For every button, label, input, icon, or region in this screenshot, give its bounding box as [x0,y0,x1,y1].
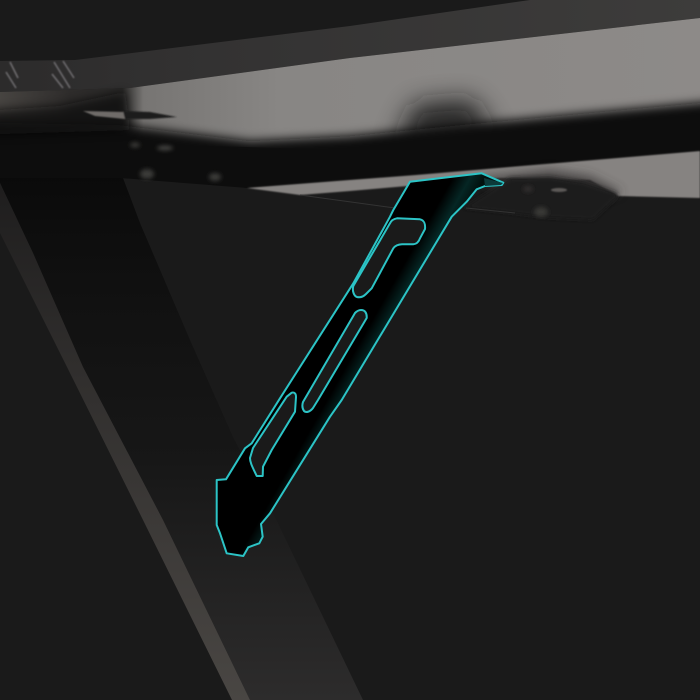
lower lit strip [247,151,700,198]
leg lit edge [0,183,250,700]
desk underside lit panel [0,18,700,150]
bracket tip [484,178,503,186]
left joint shadow [0,92,130,135]
upper slot [353,218,425,297]
desk edge strip [0,0,700,92]
foot halo [480,170,622,200]
desk leg [0,170,363,700]
lower slot [250,393,296,476]
leg face [0,170,363,700]
panel shadow patch [395,100,495,145]
dark underside band [0,96,700,188]
bracket outline [217,173,503,556]
middle slot [302,310,367,412]
left mounting screws [130,142,221,181]
faint seam lines [300,195,515,213]
foot screws [534,207,548,217]
mounting plate slit [83,111,177,119]
strip highlights [6,61,74,88]
right mounting foot [463,170,622,220]
highlighted bracket [217,173,503,556]
